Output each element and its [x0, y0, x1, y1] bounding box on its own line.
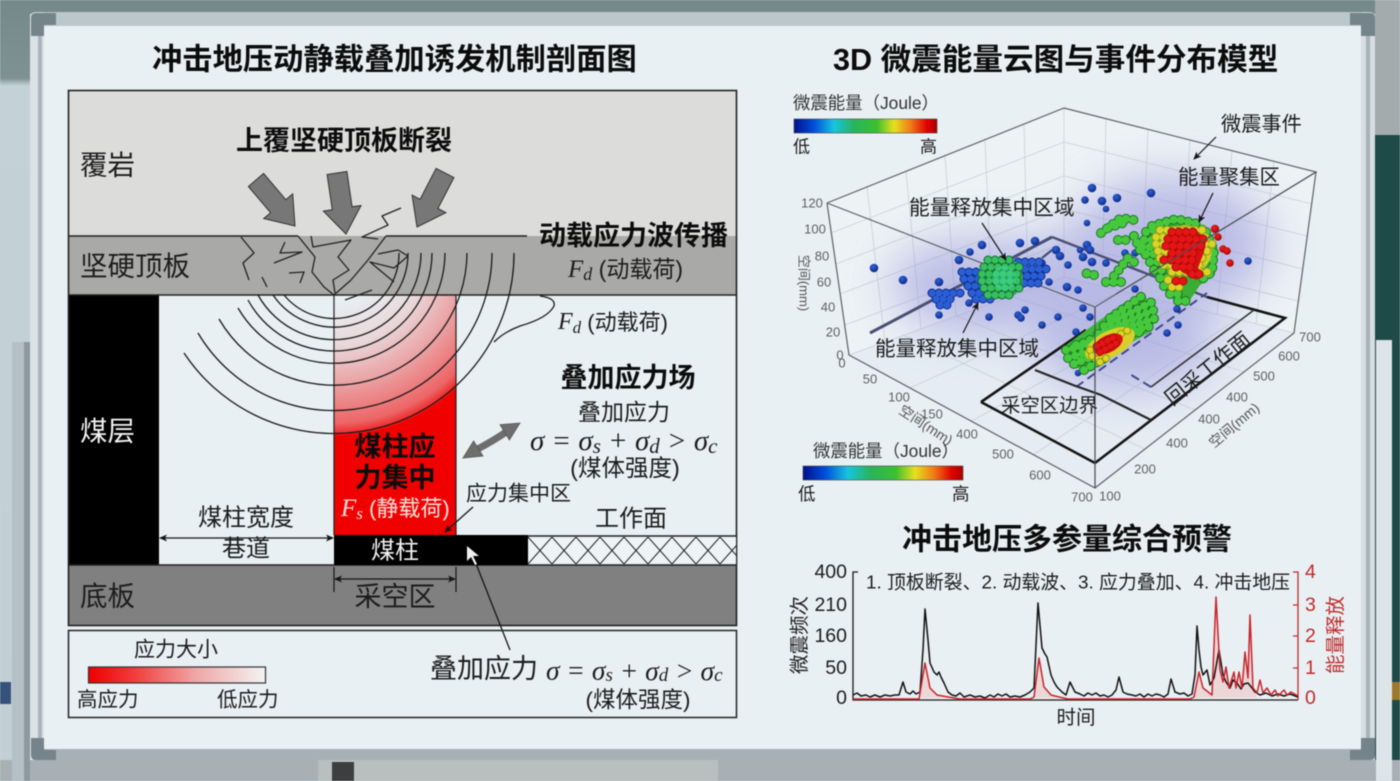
formula: legend equation: d	[659, 664, 669, 686]
z axis ticks: 0	[838, 356, 846, 370]
arrow: energy release upper	[982, 223, 1006, 260]
formula: stress superposition: + σ	[601, 425, 651, 457]
text: pillar stress concentration: 煤柱应	[354, 432, 436, 462]
text: pillar stress concentration: 力集中	[354, 463, 436, 493]
formula: static load: F	[340, 494, 357, 522]
yellow halo: lower	[1080, 320, 1140, 368]
axis lines	[853, 572, 1298, 700]
z axis ticks: 0	[836, 348, 844, 362]
y axis ticks: 400	[1166, 436, 1188, 450]
right axis ticks: 4	[1305, 561, 1316, 583]
x axis ticks: 50	[863, 372, 877, 386]
left axis ticks	[814, 561, 847, 709]
text: hard roof label: 坚硬顶板	[80, 250, 190, 282]
x axis ticks: 600	[1029, 468, 1051, 482]
title: early warning heading: 冲击地压多参量综合预警	[902, 524, 1232, 556]
legend: bottom energy scale: 微震能量（Joule）	[813, 441, 959, 461]
text: coal pillar label: 煤柱	[371, 538, 419, 564]
text: superposed stress field heading: 叠加应力场	[560, 363, 696, 393]
legend: top energy scale: 低	[793, 138, 810, 156]
y axis ticks: 600	[1278, 348, 1300, 364]
right axis ticks: 2	[1305, 625, 1316, 647]
formula: legend equation: > σ	[668, 654, 716, 686]
left axis ticks: 50	[825, 657, 847, 679]
text: working face label: 工作面	[595, 506, 667, 532]
y axis ticks	[1099, 330, 1321, 504]
text: overburden label: 覆岩	[80, 150, 135, 180]
left axis ticks: 160	[814, 625, 847, 647]
stress concentration column	[334, 295, 456, 535]
left axis ticks: 210	[814, 594, 847, 616]
z axis ticks	[801, 196, 846, 370]
dense blue cluster	[932, 262, 1048, 305]
box center edges over events	[1095, 172, 1316, 488]
legend: bottom energy scale: 低	[798, 484, 816, 504]
left axis ticks: 400	[814, 561, 847, 583]
chart: multi-parameter early warning	[789, 561, 1347, 729]
x axis ticks: 500	[992, 446, 1014, 462]
text: pillar stress concentration	[354, 432, 436, 493]
formula: dynamic load in roof: d	[583, 264, 593, 284]
right axis ticks: 1	[1305, 657, 1316, 679]
formula: static load: (静载荷)	[363, 496, 450, 520]
formula: dynamic load in roof: (动载荷)	[592, 256, 683, 282]
formula: dynamic load below roof: d	[573, 318, 582, 336]
stress wave arcs	[184, 253, 514, 434]
text: stage annotation: 1. 顶板断裂、2. 动载波、3. 应力叠加、4. 冲击地压	[866, 572, 1290, 594]
text: time label: 时间	[1056, 707, 1096, 729]
y axis ticks: 100	[1099, 488, 1121, 504]
axis label: left: 空间(mm)	[896, 402, 956, 448]
label: goaf boundary: 采空区边界	[1001, 395, 1098, 417]
dynamic load callout curve	[494, 296, 554, 342]
formula: stress superposition: σ = σ	[530, 425, 593, 457]
arrow: stress zone pointer	[445, 507, 473, 532]
box front edges	[827, 108, 1316, 488]
z axis ticks: 80	[815, 248, 829, 264]
formula: stress superposition: s	[593, 434, 601, 458]
label: energy release region lower: 能量释放集中区域	[875, 338, 1039, 360]
y axis ticks: 400	[1198, 412, 1220, 426]
formula: static load: s	[356, 504, 363, 522]
arrow: pointer to superposed stress	[473, 556, 510, 650]
rock layers	[69, 91, 736, 625]
text: superposed stress: 叠加应力	[578, 399, 670, 425]
series: energy release	[853, 597, 1298, 699]
label: energy gathering zone: 能量聚集区	[1178, 166, 1280, 189]
text: low stress: 低应力	[217, 688, 278, 712]
formula: legend equation: s	[605, 664, 613, 686]
series: microseismic frequency	[853, 603, 1298, 698]
text: goaf label: 采空区	[354, 582, 436, 612]
low-energy blue events	[870, 184, 1252, 376]
z axis ticks: 60	[817, 274, 831, 290]
text: high stress: 高应力	[77, 688, 138, 712]
load arrows	[248, 168, 454, 234]
coal pillar block	[334, 535, 528, 565]
label: microseismic event: 微震事件	[1221, 113, 1302, 136]
title: left section heading: 冲击地压动静载叠加诱发机制剖面图	[152, 42, 637, 76]
panel: stress legend	[68, 630, 736, 718]
title: 3D model heading: 3D 微震能量云图与事件分布模型	[833, 43, 1278, 77]
formula: legend equation: σ = σ	[546, 654, 605, 686]
3D box walls and grid	[827, 108, 1316, 488]
right axis ticks	[1305, 561, 1316, 709]
series: energy release fill	[919, 597, 1257, 698]
z axis ticks: 20	[826, 324, 840, 340]
formula: stress superposition: > σ	[660, 425, 710, 457]
microseismic events	[870, 184, 1252, 376]
mining layout lines	[870, 237, 1285, 463]
formula: dynamic load below roof: (动载荷)	[581, 310, 668, 334]
axis label: right: 空间(mm)	[1206, 399, 1262, 451]
text: coal seam label: 煤层	[80, 416, 135, 446]
green energy cluster: upper right	[1080, 218, 1218, 305]
dimension: goaf width	[334, 567, 456, 592]
working face hatch	[528, 536, 736, 564]
label: energy release region upper: 能量释放集中区域	[909, 196, 1075, 220]
formula: stress superposition: d	[649, 434, 660, 458]
legend: bottom energy scale	[798, 441, 970, 504]
isolated red events	[1211, 225, 1234, 267]
chart: 3D microseismic model	[796, 108, 1321, 504]
z axis ticks: 120	[801, 196, 823, 210]
green energy cluster: lower	[1066, 295, 1156, 372]
dimension arrow: pillar width	[160, 537, 333, 539]
layer boundary lines	[68, 90, 736, 626]
text: dynamic wave heading: 动载应力波传播	[539, 221, 728, 251]
z axis ticks: 40	[821, 300, 835, 314]
y axis ticks: 500	[1253, 368, 1275, 384]
x axis ticks: 100	[888, 390, 910, 404]
green energy cluster: left	[981, 257, 1023, 299]
formula: legend equation: c	[714, 664, 723, 686]
x axis ticks: 150	[921, 406, 943, 422]
legend: top energy scale: 微震能量（Joule）	[793, 93, 939, 113]
arrow: double headed interaction	[463, 423, 520, 458]
right axis ticks: 0	[1305, 687, 1316, 709]
x axis ticks: 700	[1071, 490, 1093, 504]
text: coal strength note: (煤体强度)	[586, 688, 690, 712]
legend: bottom energy scale: 高	[952, 484, 970, 504]
yellow halo: upper right	[1156, 225, 1214, 287]
axis label: vertical: 空间(mm)	[796, 255, 812, 311]
text: roadway label: 巷道	[222, 536, 270, 562]
formula: dynamic load in roof: F	[567, 256, 584, 282]
arrow: energy gathering	[1199, 193, 1213, 222]
icon: cursor pointer	[467, 546, 479, 565]
legend: top energy scale: 高	[920, 138, 937, 156]
text: coal strength note: (煤体强度)	[570, 455, 680, 481]
legend: top energy scale	[793, 93, 939, 156]
x axis ticks	[863, 372, 1093, 504]
text: superposed stress equation: 叠加应力	[430, 654, 538, 684]
text: stress zone label: 应力集中区	[466, 482, 571, 506]
label: retreat working face: 回采工作面	[1161, 328, 1255, 410]
y axis ticks: 400	[1226, 390, 1248, 404]
roof fracture cracks	[241, 208, 408, 300]
text: roof fracture heading: 上覆坚硬顶板断裂	[236, 126, 452, 156]
y axis ticks: 700	[1299, 330, 1321, 344]
arrow: energy release lower	[963, 303, 978, 333]
panel: mechanism cross-section	[68, 90, 736, 650]
text: floor label: 底板	[80, 580, 135, 612]
energy haze	[890, 175, 1270, 390]
formula: stress superposition: c	[708, 434, 718, 458]
right axis ticks: 3	[1305, 594, 1316, 616]
red core: lower	[1090, 329, 1126, 359]
x axis ticks: 400	[956, 426, 978, 442]
formula: dynamic load below roof: F	[557, 309, 573, 335]
text: legend title: 应力大小	[134, 638, 218, 662]
text: pillar width label: 煤柱宽度	[198, 504, 294, 532]
red core: upper right	[1164, 230, 1206, 281]
stress colour bar	[88, 667, 266, 683]
formula: legend equation: + σ	[613, 654, 660, 686]
axis label: energy release: 能量释放	[1325, 596, 1347, 674]
z axis ticks: 100	[804, 222, 826, 236]
axis label: frequency: 微震频次	[789, 596, 811, 674]
y axis ticks: 200	[1134, 462, 1156, 476]
left axis ticks: 0	[836, 687, 847, 709]
arrow: microseismic event	[1194, 137, 1216, 159]
